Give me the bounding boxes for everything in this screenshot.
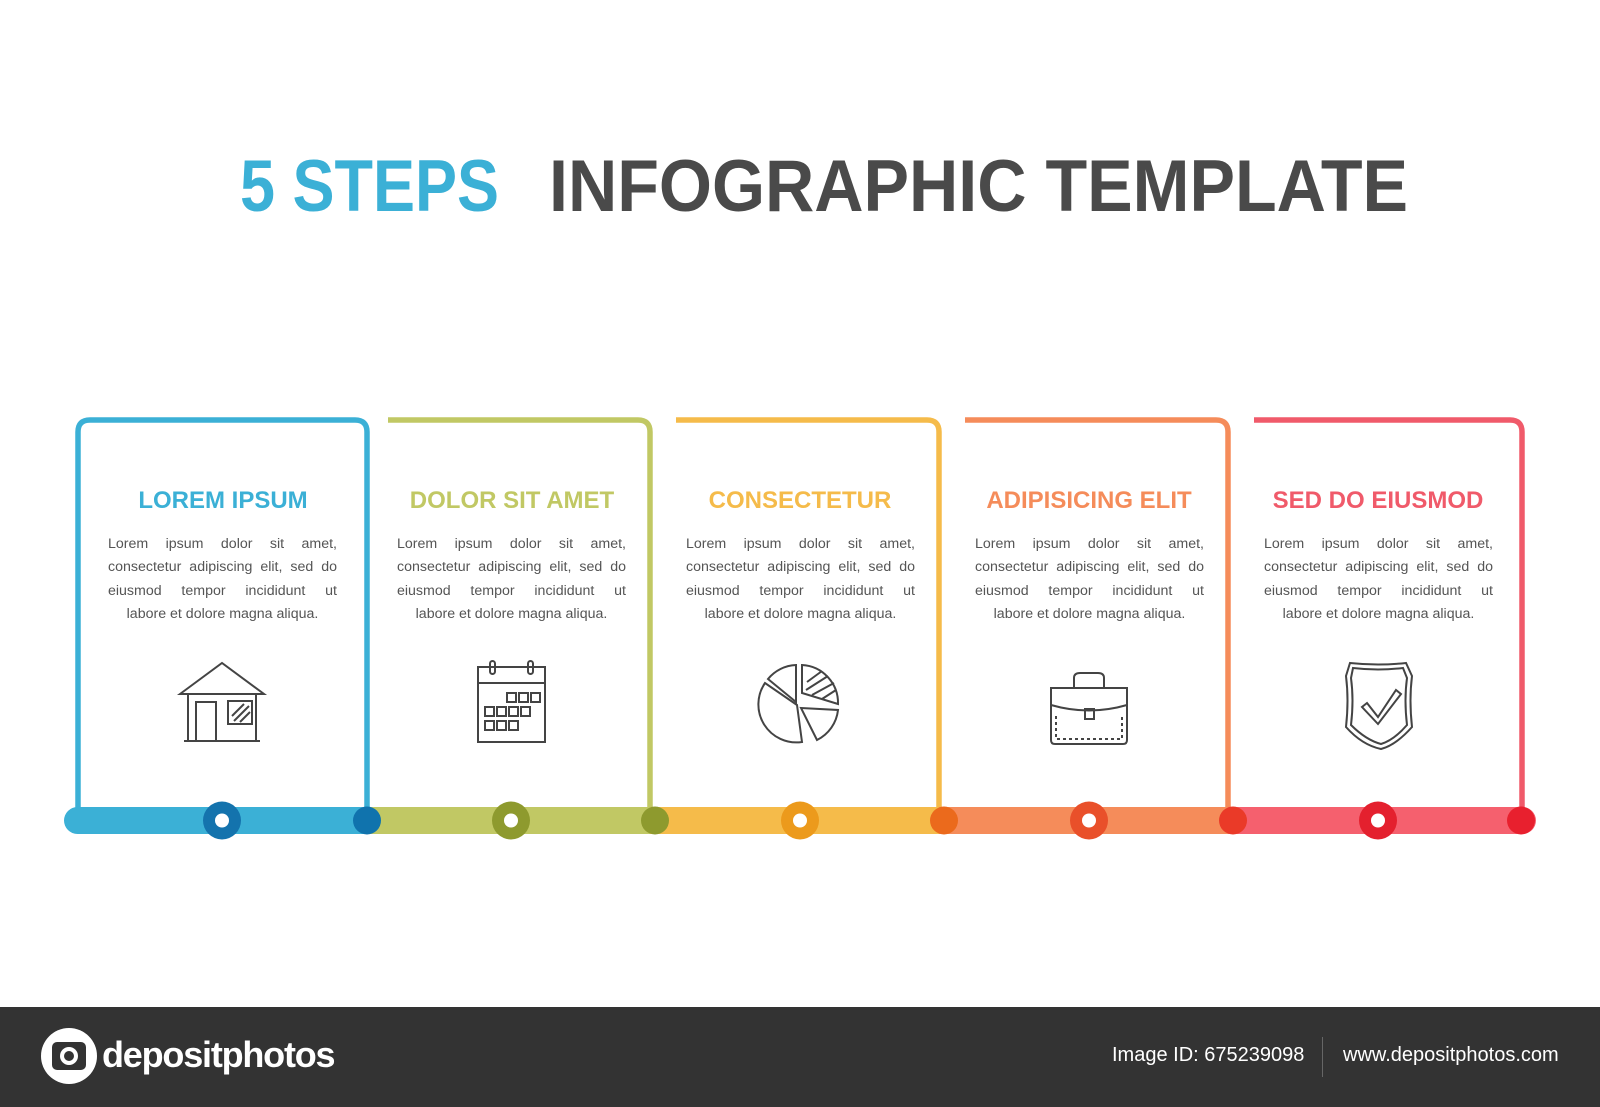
text: step 1: consectetur adipiscing elit, sed do (108, 559, 337, 575)
text: step 5 (1264, 536, 1493, 622)
text: step 5: Lorem ipsum dolor sit amet, (1264, 536, 1493, 552)
panel: step 3 frame (676, 420, 939, 820)
logo text: depositphotos (102, 1034, 334, 1075)
text: step 4: labore et dolore magna aliqua. (994, 606, 1185, 622)
text: step 2: consectetur adipiscing elit, sed do (397, 559, 626, 575)
icon: briefcase (1051, 673, 1127, 744)
text: step 2: labore et dolore magna aliqua. (416, 606, 607, 622)
text: step 5: labore et dolore magna aliqua. (1283, 606, 1474, 622)
heading: step 5: SED DO EIUSMOD (1273, 487, 1483, 514)
image id: Image ID: 675239098 (1112, 1044, 1304, 1066)
heading: step 2: DOLOR SIT AMET (410, 487, 614, 514)
icon: house (180, 663, 264, 741)
heading: step 4: ADIPISICING ELIT (986, 487, 1192, 514)
icon: shield (1346, 663, 1412, 749)
icon: pie chart (758, 665, 838, 742)
title: 5 STEPS (240, 146, 499, 227)
text: step 4: consectetur adipiscing elit, sed do (975, 559, 1204, 575)
text: step 2 (397, 536, 626, 622)
icon: logo camera (41, 1028, 97, 1084)
panel: step 5 frame (1254, 420, 1522, 820)
url: www.depositphotos.com (1343, 1044, 1559, 1066)
text: step 4: eiusmod tempor incididunt ut (975, 583, 1204, 599)
text: step 5: eiusmod tempor incididunt ut (1264, 583, 1493, 599)
title (240, 146, 1408, 227)
footer bar (0, 1007, 1600, 1107)
text: step 3: labore et dolore magna aliqua. (705, 606, 896, 622)
text: step 1: eiusmod tempor incididunt ut (108, 583, 337, 599)
title: INFOGRAPHIC TEMPLATE (549, 146, 1408, 227)
text: step 5: consectetur adipiscing elit, sed do (1264, 559, 1493, 575)
panel: step 4 frame (965, 420, 1228, 820)
text: step 2: Lorem ipsum dolor sit amet, (397, 536, 626, 552)
text: step 1: labore et dolore magna aliqua. (127, 606, 318, 622)
heading: step 1: LOREM IPSUM (138, 487, 308, 514)
text: step 4: Lorem ipsum dolor sit amet, (975, 536, 1204, 552)
timeline bar (64, 806, 1536, 834)
icon: calendar (478, 661, 545, 742)
heading: step 3: CONSECTETUR (709, 487, 891, 514)
text: step 3: consectetur adipiscing elit, sed do (686, 559, 915, 575)
text: step 3: eiusmod tempor incididunt ut (686, 583, 915, 599)
text: step 3: Lorem ipsum dolor sit amet, (686, 536, 915, 552)
panel: step 1 frame (78, 420, 367, 820)
panel: step 2 frame (388, 420, 650, 820)
step markers (203, 802, 1397, 840)
text: step 2: eiusmod tempor incididunt ut (397, 583, 626, 599)
text: step 3 (686, 536, 915, 622)
text: step 1: Lorem ipsum dolor sit amet, (108, 536, 337, 552)
text: step 4 (975, 536, 1204, 622)
text: step 1 (108, 536, 337, 622)
